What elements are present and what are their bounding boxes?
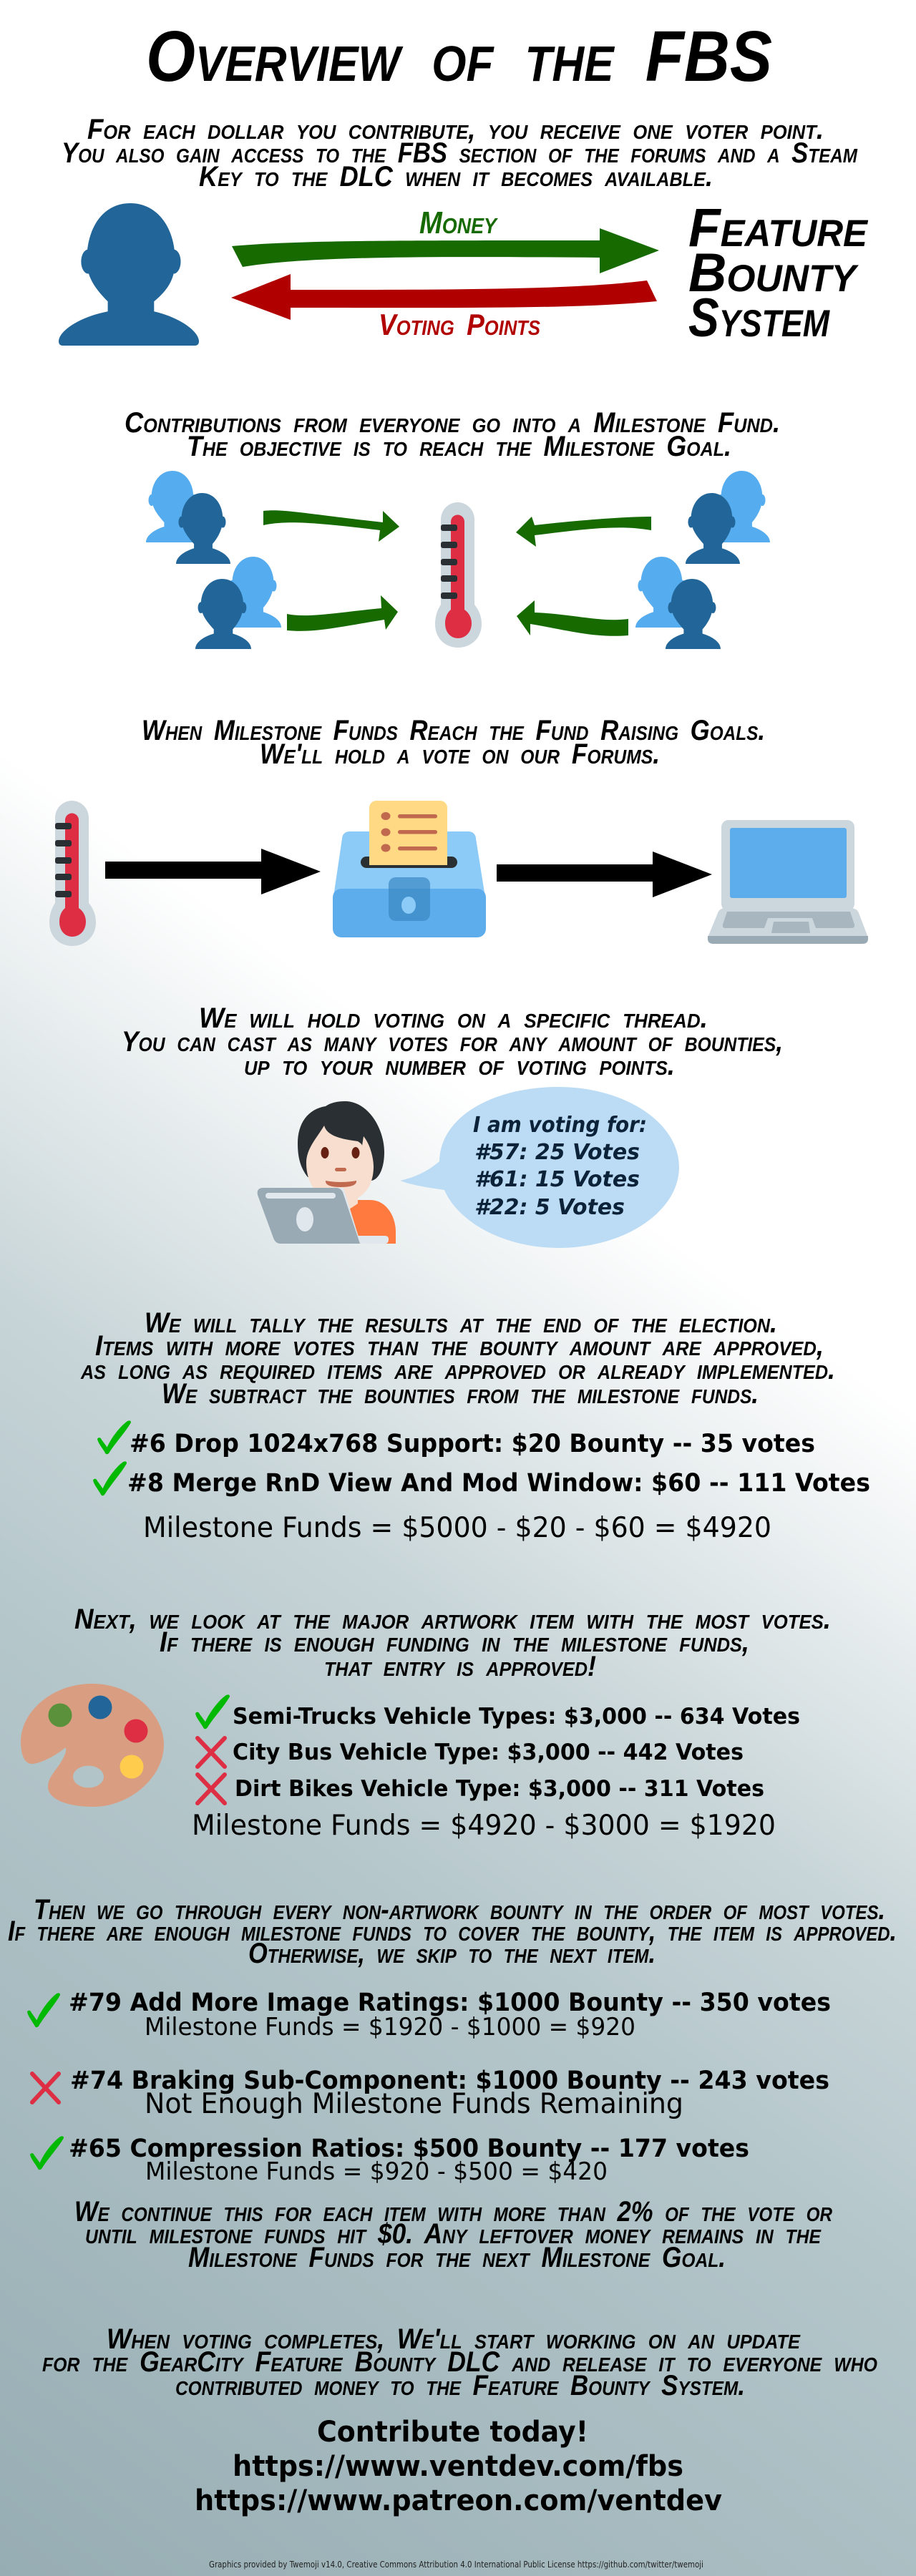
item 6: #6 Drop 1024x768 Support: $20 Bounty -- 35 votes [130, 1430, 815, 1458]
continuation text: Milestone Funds for the next Milestone Goal. [188, 2242, 726, 2273]
icon: people upper left [146, 471, 230, 564]
feature bounty system label: System [688, 288, 831, 348]
item 74: Not Enough Milestone Funds Remaining [145, 2088, 683, 2120]
speech bubble: #57: 25 Votes [474, 1140, 640, 1165]
non-artwork text: Otherwise, we skip to the next item. [248, 1938, 656, 1969]
feature bounty system label [688, 197, 869, 348]
feature bounty system label: Bounty [688, 243, 859, 303]
milestone calculation: Milestone Funds = $5000 - $20 - $60 = $4920 [143, 1512, 771, 1544]
icon: palette [21, 1684, 164, 1807]
tally text: Items with more votes than the bounty amount are approved, [95, 1330, 824, 1362]
non-artwork text [8, 1894, 897, 1969]
milestone fund text: The objective is to reach the Milestone Goal. [187, 431, 731, 462]
completion text: When voting completes, We'll start working on an update [107, 2323, 801, 2355]
artwork item: dirt bikes: Dirt Bikes Vehicle Type: $3,000 -- 311 Votes [235, 1776, 764, 1802]
artwork text: that entry is approved! [324, 1651, 596, 1682]
item 65 [30, 2135, 749, 2186]
arrow: lower right into thermometer [517, 600, 628, 636]
voting instructions text: up to your number of voting points. [244, 1050, 675, 1081]
label: money: Money [419, 205, 499, 240]
speech bubble: #61: 15 Votes [474, 1167, 640, 1192]
arrow: upper right into thermometer [516, 517, 651, 547]
icon: people lower right [635, 557, 721, 649]
arrow: ballot box to laptop [497, 852, 712, 897]
intro text: Key to the DLC when it becomes available. [199, 161, 713, 192]
tally text [80, 1307, 835, 1410]
icon: thermometer small [49, 801, 96, 946]
item 79 [27, 1989, 831, 2041]
artwork item: semi-trucks [195, 1694, 800, 1729]
arrow: lower left into thermometer [287, 595, 398, 631]
arrow: thermometer to ballot box [105, 849, 321, 894]
tally text: We will tally the results at the end of the election. [145, 1307, 777, 1339]
arrow: money [232, 228, 659, 273]
milestone fund text [125, 407, 780, 462]
speech bubble [400, 1087, 679, 1248]
artwork text [74, 1604, 831, 1682]
item 79: #79 Add More Image Ratings: $1000 Bounty -- 350 votes [69, 1989, 831, 2017]
voting instructions text: We will hold voting on a specific thread. [199, 1002, 708, 1034]
call to action [195, 2416, 722, 2517]
feature bounty system label: Feature [688, 197, 869, 258]
artwork item: semi-trucks: Semi-Trucks Vehicle Types: $3,000 -- 634 Votes [233, 1704, 800, 1729]
tally text: as long as required items are approved or already implemented. [80, 1354, 835, 1385]
icon: check item 8 [93, 1461, 127, 1496]
vote announcement text [142, 715, 765, 770]
completion text: contributed money to the Feature Bounty System. [175, 2370, 745, 2401]
credits: Graphics provided by Twemoji v14.0, Creative Commons Attribution 4.0 International Public License https://github.com/twitter/twemoji [209, 2560, 703, 2570]
speech bubble: I am voting for: [473, 1113, 647, 1138]
milestone fund text: Contributions from everyone go into a Milestone Fund. [125, 407, 780, 439]
voting instructions text: You can cast as many votes for any amount of bounties, [122, 1026, 783, 1058]
artwork item: city bus: City Bus Vehicle Type: $3,000 -- 442 Votes [233, 1740, 744, 1765]
icon: person on laptop [258, 1101, 396, 1244]
icon: people lower left [195, 557, 281, 649]
title: Overview of the FBS [146, 16, 772, 97]
intro text [62, 114, 858, 192]
artwork text: Next, we look at the major artwork item with the most votes. [74, 1604, 831, 1635]
arrow: upper left into thermometer [263, 510, 399, 542]
item 74 [32, 2067, 829, 2120]
vote announcement text: We'll hold a vote on our Forums. [260, 738, 660, 770]
label: voting points: Voting Points [379, 308, 541, 341]
icon: contributor silhouette [59, 203, 199, 346]
artwork text: If there is enough funding in the milestone funds, [160, 1626, 749, 1658]
completion text [42, 2323, 877, 2401]
vote announcement text: When Milestone Funds Reach the Fund Raising Goals. [142, 715, 765, 746]
continuation text: until milestone funds hit $0. Any leftover money remains in the [85, 2218, 822, 2250]
item 65: #65 Compression Ratios: $500 Bounty -- 177 votes [69, 2135, 749, 2163]
intro text: For each dollar you contribute, you receive one voter point. [87, 114, 824, 145]
icon: thermometer [435, 502, 482, 648]
icon: check item 6 [97, 1420, 131, 1454]
call to action: https://www.patreon.com/ventdev [195, 2484, 722, 2517]
icon: people upper right [686, 471, 770, 564]
icon: ballot box [333, 801, 486, 937]
artwork calculation: Milestone Funds = $4920 - $3000 = $1920 [192, 1810, 776, 1842]
icon: laptop [708, 820, 868, 944]
tally text: We subtract the bounties from the milestone funds. [162, 1378, 759, 1410]
item 79: Milestone Funds = $1920 - $1000 = $920 [145, 2013, 635, 2041]
speech bubble: #22: 5 Votes [474, 1195, 625, 1220]
continuation text [74, 2196, 833, 2273]
call to action: Contribute today! [317, 2416, 588, 2449]
item 65: Milestone Funds = $920 - $500 = $420 [145, 2157, 608, 2186]
arrow: voting points [231, 274, 657, 320]
item 8: #8 Merge RnD View And Mod Window: $60 -- 111 Votes [127, 1469, 870, 1498]
item 74: #74 Braking Sub-Component: $1000 Bounty -- 243 votes [70, 2067, 829, 2095]
call to action: https://www.ventdev.com/fbs [233, 2450, 683, 2483]
voting instructions text [122, 1002, 783, 1081]
